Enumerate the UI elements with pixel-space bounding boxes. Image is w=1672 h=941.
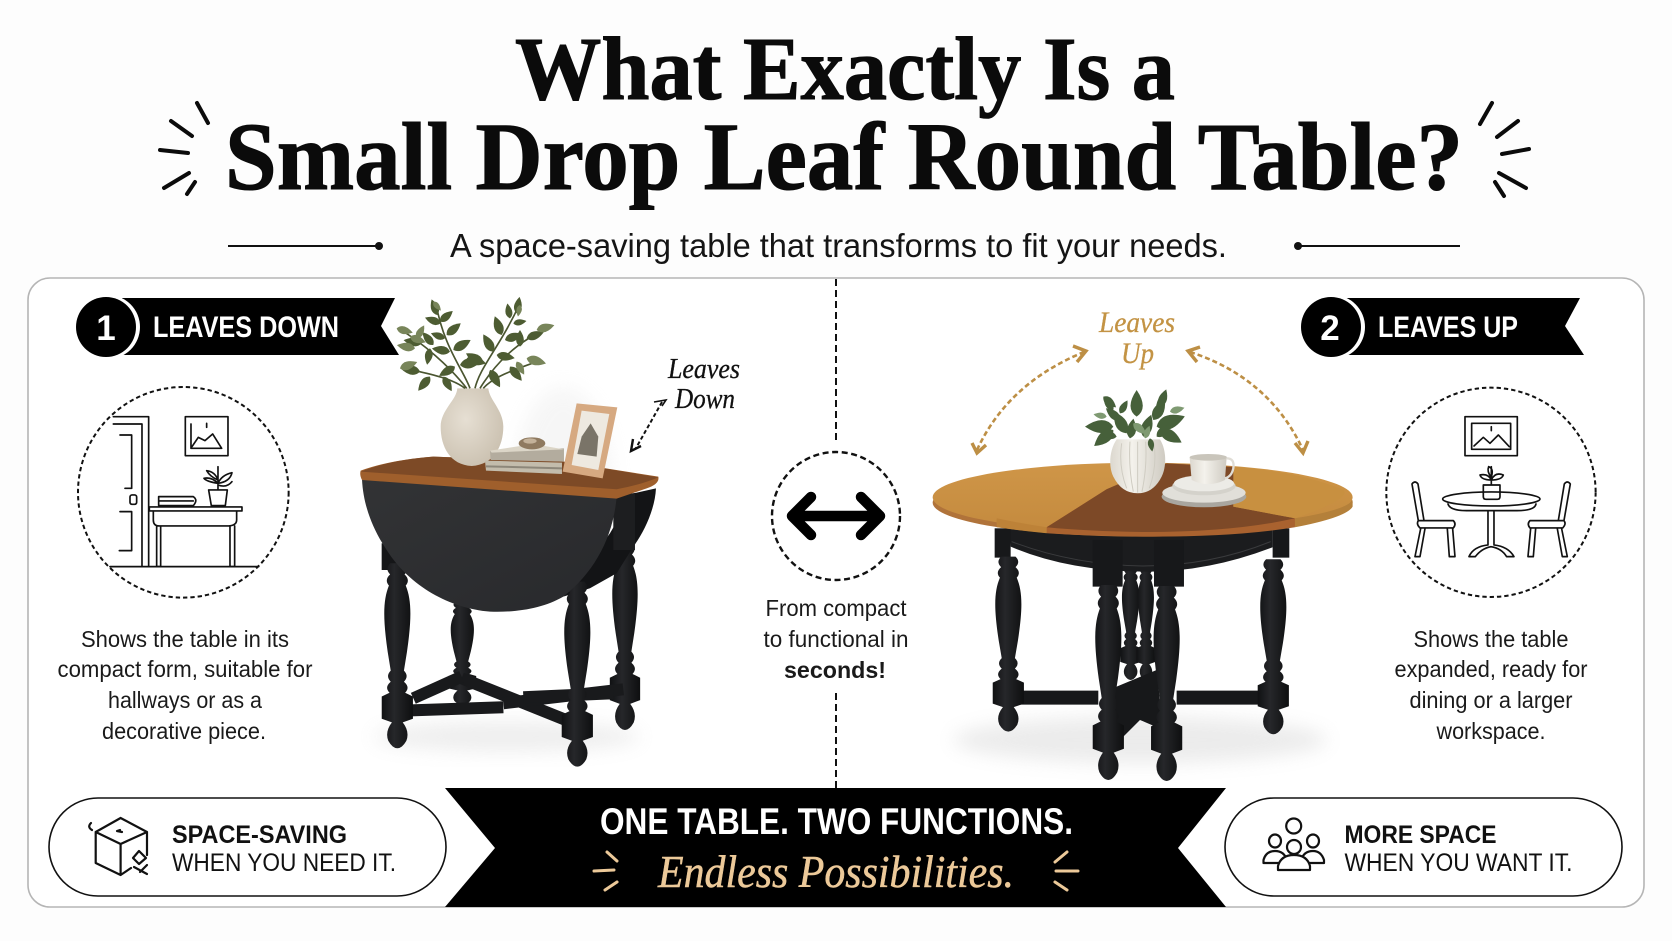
- back legs: [1120, 567, 1156, 680]
- subtitle: A space-saving table that transforms to fit your needs.: [450, 227, 1227, 264]
- label: leaves up: Leaves: [1098, 306, 1175, 339]
- rear leaf and apron: [563, 488, 656, 597]
- text: leaves down description: compact form, suitable for: [58, 656, 313, 682]
- badge: leaves down: [76, 295, 399, 359]
- books: [485, 461, 562, 474]
- badge: leaves down: 1: [96, 309, 116, 348]
- text: center caption: seconds!: [784, 657, 886, 683]
- drop leaf table, leaves down: [360, 296, 658, 767]
- plant: [396, 296, 555, 393]
- arrow: right leaf arc: [1188, 347, 1308, 453]
- text: center caption: [764, 595, 908, 683]
- icon: left banner sparks: [594, 852, 617, 890]
- icon: people: [1264, 818, 1324, 870]
- table top: [933, 469, 1353, 537]
- callout: space-saving: WHEN YOU NEED IT.: [172, 849, 396, 877]
- vase: [441, 388, 503, 466]
- drop leaf table, leaves up: [933, 388, 1353, 781]
- icon: right banner sparks: [1055, 852, 1078, 890]
- icon: hallway table in dashed circle: [78, 387, 289, 598]
- title: [225, 20, 1463, 210]
- legs: [995, 528, 1289, 587]
- picture frame: [563, 403, 617, 478]
- text: leaves down description: hallways or as a: [108, 687, 262, 713]
- front leaf: [362, 479, 617, 612]
- text: leaves up description: expanded, ready for: [1394, 656, 1588, 682]
- icon: dining table in dashed circle: [1386, 388, 1596, 597]
- icon: center transform arrow in dashed circle: [772, 452, 900, 580]
- center banner: Endless Possibilities.: [657, 847, 1014, 897]
- text: leaves up description: workspace.: [1436, 718, 1546, 744]
- left subtitle rule: [228, 242, 383, 250]
- badge: leaves down: LEAVES DOWN: [153, 311, 339, 344]
- badge: leaves up: 2: [1320, 309, 1340, 348]
- wedge: [1047, 463, 1295, 537]
- table top: [360, 457, 658, 499]
- label: leaves down: [631, 353, 740, 451]
- center banner: ONE TABLE. TWO FUNCTIONS.: [600, 801, 1073, 842]
- icon: box: [89, 818, 147, 875]
- text: leaves up description: Shows the table: [1414, 626, 1568, 652]
- back legs: [448, 543, 640, 730]
- apron: [1010, 528, 1273, 572]
- label: leaves down: Down: [674, 383, 735, 415]
- text: center caption: to functional in: [764, 626, 908, 652]
- title: What Exactly Is a: [515, 20, 1175, 119]
- front legs: [382, 563, 593, 767]
- callout: space-saving: [49, 798, 446, 896]
- label: leaves up: Up: [1121, 337, 1154, 370]
- badge: leaves up: LEAVES UP: [1378, 311, 1518, 344]
- text: leaves up description: [1394, 626, 1588, 744]
- callout: space-saving: SPACE-SAVING: [172, 821, 347, 849]
- center banner: [445, 788, 1226, 907]
- pot: [1110, 439, 1165, 493]
- callout: more space: [1225, 798, 1622, 896]
- badge: leaves up: [1301, 295, 1584, 359]
- text: center caption: From compact: [766, 595, 907, 621]
- text: leaves down description: Shows the table in its: [81, 626, 289, 652]
- text: leaves down description: [58, 626, 313, 744]
- text: leaves up description: dining or a larger: [1410, 687, 1573, 713]
- plant: [1085, 388, 1187, 452]
- title: Small Drop Leaf Round Table?: [225, 103, 1463, 210]
- callout: more space: WHEN YOU WANT IT.: [1344, 849, 1572, 877]
- label: leaves down: Leaves: [667, 353, 740, 385]
- label: leaves up: [1098, 306, 1175, 370]
- main panel: [28, 278, 1644, 907]
- stretchers: [403, 677, 623, 722]
- plates and cup: [1162, 486, 1246, 507]
- arrow: left leaf arc: [972, 346, 1086, 453]
- icon: right title sparks: [1480, 103, 1529, 196]
- right subtitle rule: [1294, 242, 1460, 250]
- text: leaves down description: decorative piece.: [102, 718, 266, 744]
- icon: left title sparks: [160, 103, 208, 194]
- stretchers: [1015, 670, 1263, 740]
- callout: more space: MORE SPACE: [1344, 821, 1496, 849]
